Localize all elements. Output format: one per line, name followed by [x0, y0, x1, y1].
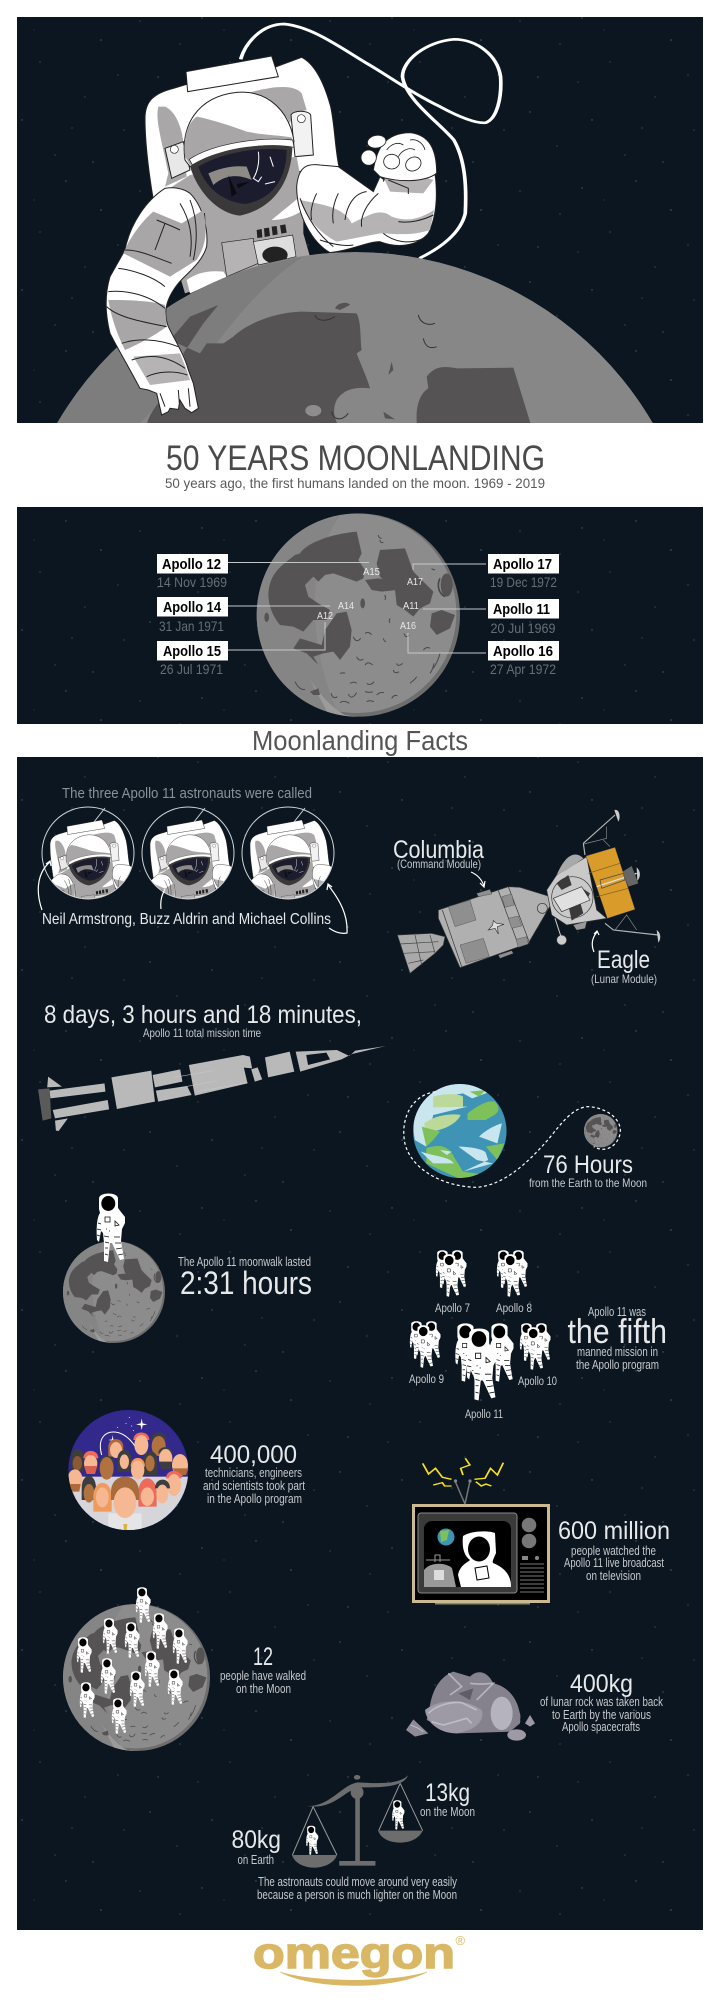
text: crew names: Neil Armstrong, Buzz Aldrin and Michael Collins — [42, 911, 331, 928]
stat: mission time: 8 days, 3 hours and 18 minutes, — [44, 1001, 362, 1029]
text: weight note: because a person is much lighter on the Moon — [257, 1888, 457, 1902]
text: crew intro: The three Apollo 11 astronauts were called — [62, 785, 312, 802]
stat: 80kg: 80kg — [232, 1826, 281, 1854]
crowd illustration — [67, 1408, 190, 1533]
label: Apollo 14 — [157, 597, 228, 634]
label: Apollo 16 — [488, 641, 559, 677]
label: Apollo 14: 31 Jan 1971 — [159, 618, 224, 634]
tether cable — [241, 24, 501, 258]
label: Apollo 15 — [157, 641, 228, 677]
logo: omegon — [253, 1929, 466, 1986]
stat: 12 — [220, 1643, 306, 1696]
heading: facts: Moonlanding Facts — [252, 725, 468, 756]
label: Eagle — [591, 946, 657, 986]
astronaut upper body — [145, 56, 437, 293]
label: Columbia: Columbia — [393, 836, 484, 864]
site labels on moon: A14 — [338, 601, 354, 612]
site labels on moon: A12 — [317, 611, 333, 622]
stat: 400,000 — [203, 1441, 305, 1506]
stat: 400kg: Apollo spacecrafts — [562, 1720, 640, 1734]
site labels on moon: A17 — [407, 577, 423, 588]
stat: 600 million: on television — [586, 1569, 641, 1583]
label: Apollo 17 — [488, 554, 559, 590]
arrow: Eagle — [592, 931, 599, 952]
panel: hero — [17, 17, 703, 423]
label: Apollo 12: Apollo 12 — [162, 556, 221, 573]
stat: moonwalk — [178, 1254, 312, 1301]
television — [414, 1458, 548, 1604]
text: weight note: The astronauts could move around very easily — [258, 1875, 458, 1889]
label: Apollo 17: 19 Dec 1972 — [490, 574, 557, 590]
stat: 76 hours — [529, 1151, 647, 1190]
label: Apollo 14: Apollo 14 — [163, 599, 222, 616]
stat: 600 million: 600 million — [558, 1517, 670, 1545]
stat: mission time — [44, 1001, 362, 1040]
apollo crews: Apollo 7 — [435, 1303, 470, 1315]
label: Apollo 11: Apollo 11 — [493, 601, 550, 618]
connector lines — [228, 562, 486, 653]
label: Apollo 12: 14 Nov 1969 — [157, 574, 227, 590]
stat: moonwalk: The Apollo 11 moonwalk lasted — [178, 1254, 311, 1269]
stat: 600 million: Apollo 11 live broadcast — [564, 1556, 664, 1570]
stat: the fifth: Apollo 11 was — [588, 1305, 646, 1319]
apollo crews: Apollo 10 — [518, 1376, 557, 1388]
small moon — [582, 1114, 618, 1149]
site labels on moon — [317, 567, 423, 632]
panel: facts — [17, 757, 703, 1930]
moon surface — [57, 252, 653, 423]
stat: 80kg — [232, 1826, 281, 1867]
label: Apollo 15: Apollo 15 — [163, 643, 221, 660]
stat: 13kg: 13kg — [425, 1779, 470, 1807]
rocket — [38, 1046, 386, 1131]
moon with twelve astronauts — [56, 1587, 210, 1756]
stat: 400,000: and scientists took part — [203, 1479, 305, 1493]
stat: 76 hours: from the Earth to the Moon — [529, 1176, 647, 1190]
stat: mission time: Apollo 11 total mission time — [143, 1026, 261, 1040]
stat: 400kg: to Earth by the various — [552, 1708, 651, 1722]
stat: 600 million: people watched the — [571, 1544, 656, 1558]
arrow: Columbia — [471, 872, 485, 887]
apollo crews: Apollo 8 — [496, 1303, 532, 1315]
panel: landing sites map — [17, 507, 703, 724]
label: Apollo 11: 20 Jul 1969 — [490, 620, 556, 636]
stat: 76 hours: 76 Hours — [543, 1151, 633, 1179]
label: Apollo 16: Apollo 16 — [493, 643, 553, 660]
label: Columbia: (Command Module) — [397, 857, 481, 871]
moon map — [247, 513, 460, 723]
stat: 12: people have walked — [220, 1669, 306, 1683]
label: Eagle: (Lunar Module) — [591, 972, 657, 986]
stat: 400kg: 400kg — [570, 1670, 633, 1698]
stat: 600 million — [558, 1517, 670, 1583]
apollo crews — [409, 1250, 557, 1421]
stat: the fifth — [568, 1305, 667, 1372]
site labels on moon: A11 — [403, 601, 419, 612]
dashed trajectory — [404, 1092, 620, 1187]
apollo crews: Apollo 9 — [409, 1374, 444, 1386]
label: Apollo 15: 26 Jul 1971 — [160, 661, 223, 677]
stat: the fifth: the Apollo program — [576, 1358, 659, 1372]
earth — [413, 1083, 507, 1178]
moon with astronaut — [58, 1194, 165, 1346]
label: Apollo 16: 27 Apr 1972 — [490, 661, 556, 677]
stat: 400kg: of lunar rock was taken back — [540, 1695, 664, 1709]
stat: 13kg: on the Moon — [420, 1805, 475, 1819]
stat: the fifth: the fifth — [568, 1313, 667, 1351]
stat: 400,000: 400,000 — [210, 1441, 297, 1469]
label: Apollo 17: Apollo 17 — [493, 556, 552, 573]
title: 50 YEARS MOONLANDING — [166, 439, 545, 478]
stat: 13kg — [420, 1779, 475, 1819]
crew portraits — [42, 806, 334, 900]
stat: 80kg: on Earth — [238, 1853, 274, 1867]
stat: 400,000: technicians, engineers — [205, 1466, 302, 1480]
balance scale — [292, 1775, 423, 1868]
label: Apollo 12 — [157, 554, 228, 590]
apollo crews: Apollo 11 — [465, 1409, 503, 1421]
subtitle: 50 years ago, the first humans landed on the moon. 1969 - 2019 — [165, 475, 545, 491]
stat: 12: 12 — [253, 1643, 273, 1671]
arrows to crew — [38, 861, 347, 933]
site labels on moon: A15 — [363, 567, 380, 578]
logo: omegon: omegon — [253, 1929, 455, 1978]
logo: omegon: ® — [456, 1933, 466, 1948]
stat: 400kg — [540, 1670, 664, 1734]
label: Eagle: Eagle — [597, 946, 650, 974]
stat: 400,000: in the Apollo program — [207, 1492, 302, 1506]
stat: the fifth: manned mission in — [577, 1345, 658, 1359]
text: weight note — [257, 1875, 458, 1902]
spacecraft — [397, 810, 660, 973]
lunar rocks — [406, 1672, 535, 1741]
stat: 12: on the Moon — [236, 1682, 291, 1696]
site labels on moon: A16 — [400, 621, 416, 632]
label: Apollo 11 — [488, 599, 559, 636]
astronaut arm resting on moon — [106, 188, 207, 415]
stat: moonwalk: 2:31 hours — [180, 1265, 312, 1301]
